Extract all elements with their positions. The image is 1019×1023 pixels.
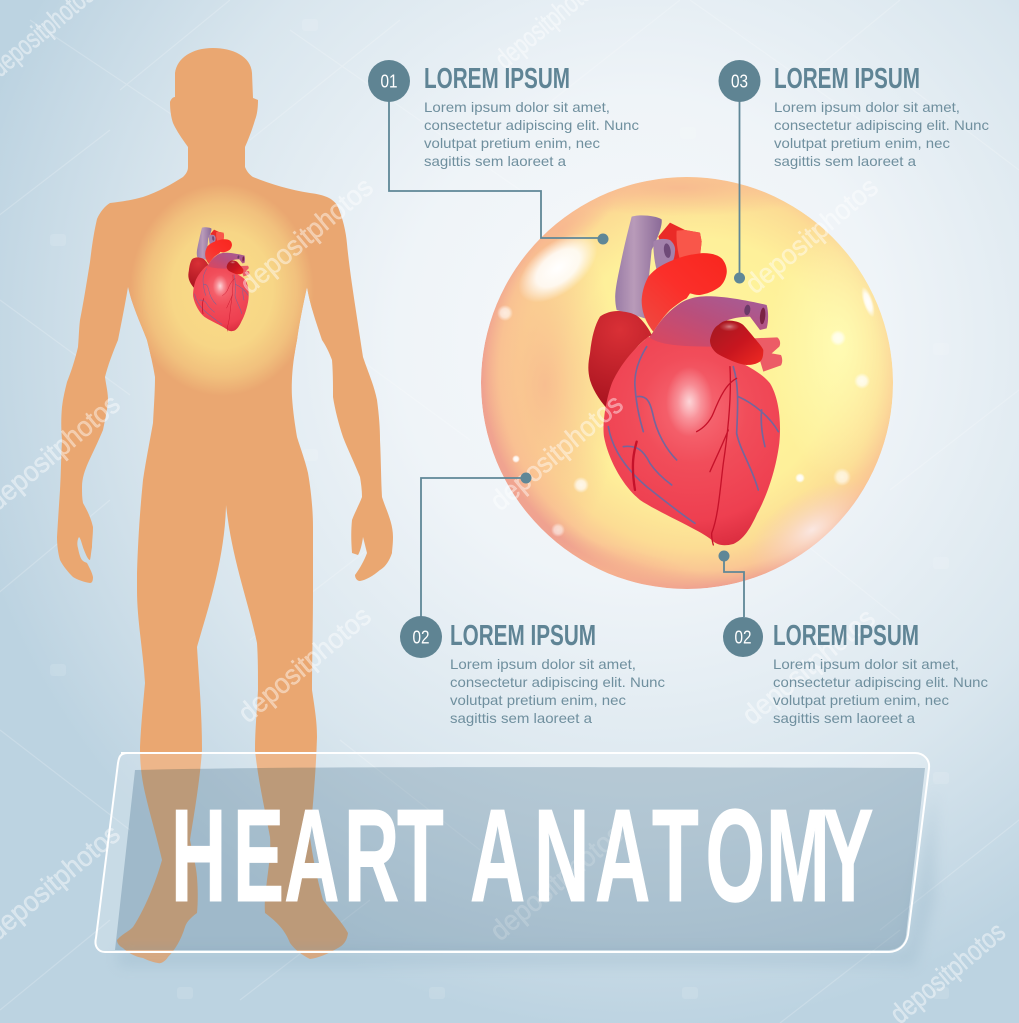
connector 03: [734, 100, 745, 284]
watermark text: depositphotos: [232, 600, 377, 729]
block 01: Lorem ipsum dolor sit amet,: [424, 99, 610, 115]
connector 02 right: [718, 550, 744, 617]
watermark text: depositphotos: [484, 818, 629, 947]
block 03: [718, 60, 989, 169]
block 02 right: LOREM IPSUM: [773, 620, 919, 652]
block 02 left: consectetur adipiscing elit. Nunc: [450, 674, 665, 690]
chest glow: [130, 184, 314, 396]
block 02 right: volutpat pretium enim, nec: [773, 692, 949, 708]
watermark text: depositphotos: [736, 602, 881, 731]
block 02 left: volutpat pretium enim, nec: [450, 692, 626, 708]
block 01: LOREM IPSUM: [424, 63, 570, 95]
block 03: consectetur adipiscing elit. Nunc: [774, 117, 989, 133]
icon: small heart in chest: [188, 227, 249, 331]
block 01: sagittis sem laoreet a: [424, 153, 566, 169]
human body silhouette: [57, 48, 393, 963]
watermark text: depositphotos: [234, 171, 379, 300]
block 02 left: LOREM IPSUM: [450, 620, 596, 652]
connector 02 left: [421, 472, 532, 617]
block 03: Lorem ipsum dolor sit amet,: [774, 99, 960, 115]
icon: large heart: [588, 215, 782, 545]
watermark text: depositphotos: [484, 388, 629, 517]
block 02 right: [723, 617, 988, 726]
block 01: volutpat pretium enim, nec: [424, 135, 600, 151]
block 02 right: consectetur adipiscing elit. Nunc: [773, 674, 988, 690]
block 02 right: sagittis sem laoreet a: [773, 710, 915, 726]
block 02 left: [400, 616, 665, 726]
block 02 right: 02: [734, 628, 752, 648]
connector 01: [389, 100, 608, 244]
block 02 right: Lorem ipsum dolor sit amet,: [773, 656, 959, 672]
bubble: [481, 177, 893, 589]
title: HEART ANATOMY: [171, 781, 874, 929]
block 02 left: Lorem ipsum dolor sit amet,: [450, 656, 636, 672]
block 03: LOREM IPSUM: [774, 63, 920, 95]
block 01: [368, 60, 639, 169]
block 02 left: sagittis sem laoreet a: [450, 710, 592, 726]
callout: bubble with magnified heart: [481, 177, 893, 589]
block 02 left: 02: [412, 628, 430, 648]
block 01: consectetur adipiscing elit. Nunc: [424, 117, 639, 133]
watermark text: depositphotos: [739, 171, 884, 300]
block 01: 01: [380, 72, 398, 92]
block 03: sagittis sem laoreet a: [774, 153, 916, 169]
block 03: volutpat pretium enim, nec: [774, 135, 950, 151]
glass title panel: [95, 753, 935, 966]
block 03: 03: [731, 72, 748, 92]
